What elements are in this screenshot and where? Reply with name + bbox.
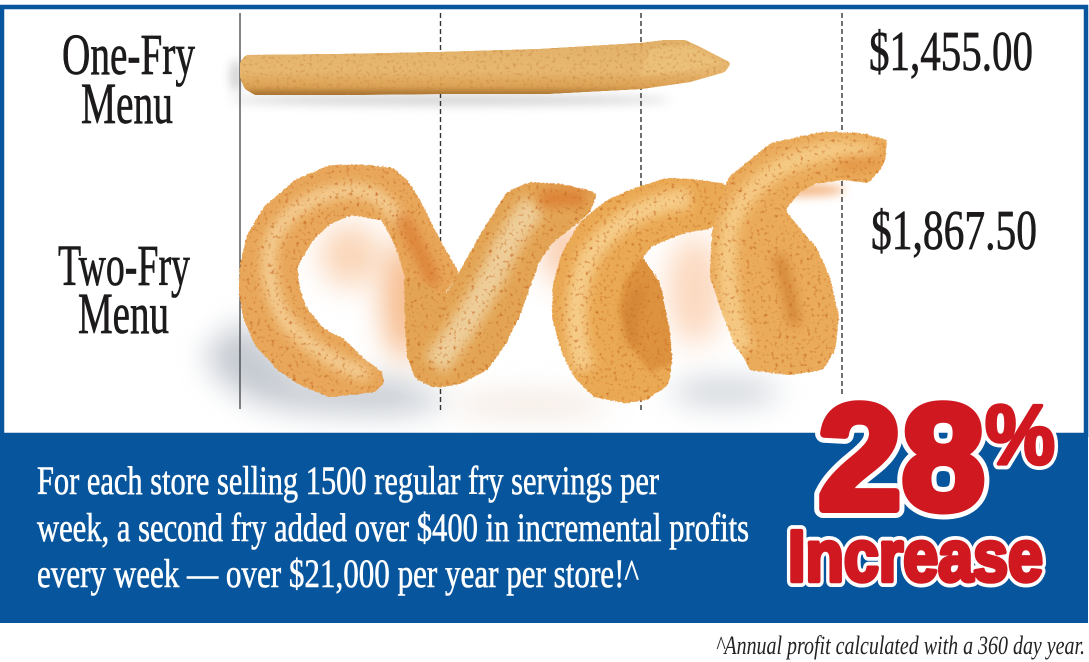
callout: 28% Increase — [788, 373, 1055, 597]
blue summary band — [0, 433, 1088, 623]
summary text — [37, 458, 749, 596]
row label: One-Fry Menu — [62, 22, 195, 136]
value: one-fry profit: $1,455.00 — [869, 21, 1033, 83]
row label: Two-Fry Menu — [58, 233, 190, 346]
blue frame of the chart panel — [2, 7, 1086, 435]
row label: One-Fry Menu: One-Fry — [62, 22, 195, 87]
curly fry bar: two-fry menu — [239, 132, 887, 403]
callout word: Increase: Increase — [788, 517, 1043, 597]
curly fry segment 4 — [710, 132, 887, 375]
curly fry segment 1 — [239, 165, 459, 397]
summary text: week, a second fry added over $400 in incremental profits — [37, 505, 749, 550]
axis lines: baseline and dashed gridlines — [240, 13, 842, 411]
straight fry bar: one-fry menu — [240, 40, 731, 95]
curly fry segment 3 — [552, 178, 726, 403]
callout percent sign: % — [985, 388, 1055, 482]
curly fry segment 2 — [404, 182, 597, 388]
callout figure: 28: 28 — [818, 373, 985, 541]
row label: Two-Fry Menu: Two-Fry — [58, 233, 190, 298]
callout word: Increase: Increase — [788, 517, 1043, 597]
summary text: every week — over $21,000 per year per store!^ — [37, 551, 639, 596]
callout percent sign: % — [985, 388, 1055, 482]
fry shadows — [205, 60, 845, 415]
row label: One-Fry Menu: Menu — [81, 71, 173, 136]
callout figure: 28: 28 — [818, 373, 985, 541]
row label: Two-Fry Menu: Menu — [78, 281, 169, 346]
summary text: For each store selling 1500 regular fry servings per — [37, 458, 659, 503]
value: two-fry profit: $1,867.50 — [871, 200, 1037, 262]
